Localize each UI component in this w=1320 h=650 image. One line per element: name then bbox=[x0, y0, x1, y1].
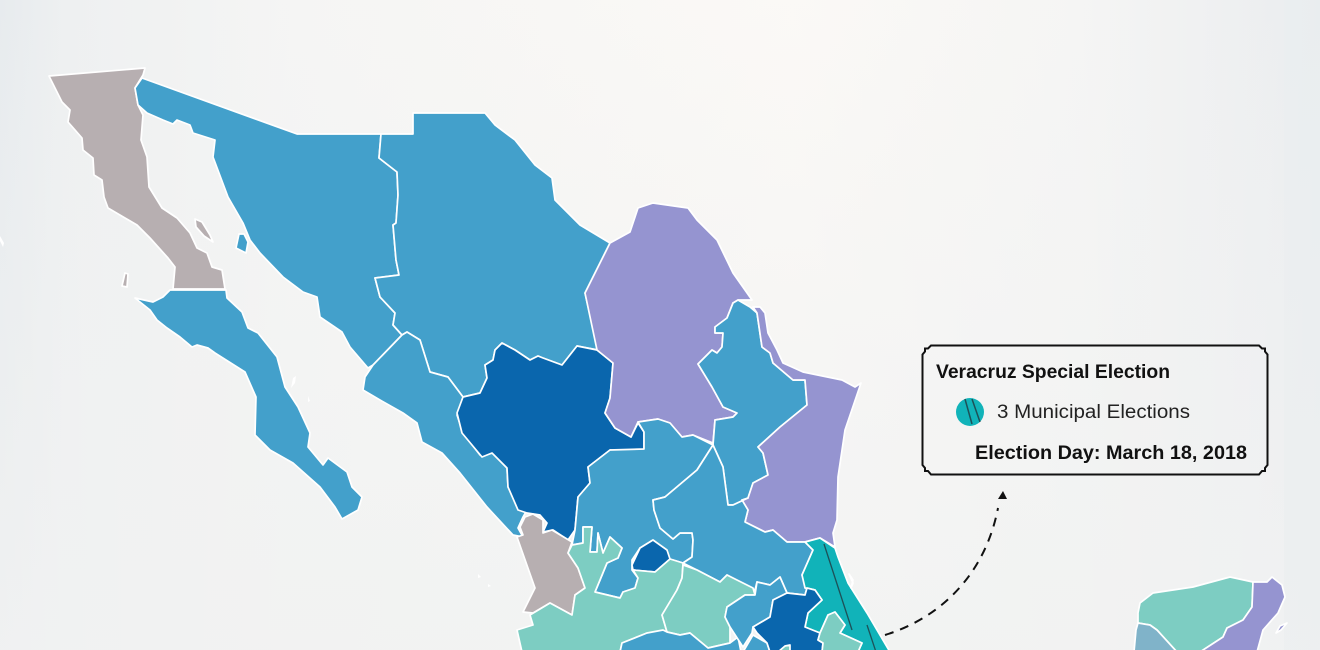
state: Quintana Roo bbox=[1200, 577, 1287, 650]
callout: Veracruz special election bbox=[922, 346, 1268, 474]
special-election hatch lines on Veracruz bbox=[824, 544, 876, 650]
state: Baja California Sur bbox=[135, 290, 362, 519]
dashed arrow to callout bbox=[885, 491, 1007, 635]
state: Durango bbox=[457, 343, 644, 540]
state: Sonora bbox=[135, 78, 402, 368]
callout heading: Veracruz Special Election bbox=[936, 362, 1170, 383]
state: Puebla bbox=[818, 612, 862, 650]
state: Nuevo Leon bbox=[698, 300, 807, 505]
small islands bbox=[0, 236, 491, 587]
state: Tlaxcala bbox=[778, 645, 790, 650]
state: Coahuila bbox=[585, 203, 752, 443]
state: Jalisco bbox=[517, 527, 683, 650]
legend label: 3 Municipal Elections bbox=[997, 402, 1190, 423]
state: Veracruz bbox=[802, 538, 890, 650]
state: Yucatan bbox=[1138, 577, 1253, 650]
state: Michoacan bbox=[620, 630, 741, 650]
state: Zacatecas bbox=[572, 419, 713, 598]
state: San Luis Potosi bbox=[653, 445, 813, 595]
state: Baja California bbox=[49, 68, 225, 289]
state: Queretaro bbox=[725, 577, 787, 647]
election date: Election Day: March 18, 2018 bbox=[975, 443, 1247, 464]
state: Sinaloa bbox=[363, 332, 527, 537]
state: Nayarit bbox=[517, 514, 585, 615]
state: Chihuahua bbox=[375, 113, 610, 397]
state: Hidalgo bbox=[753, 588, 823, 650]
state: Guanajuato bbox=[662, 565, 755, 648]
legend icon: hatched teal circle bbox=[956, 398, 984, 426]
state: Tamaulipas bbox=[742, 307, 861, 547]
state: Campeche bbox=[1134, 623, 1177, 650]
state: Mexico bbox=[743, 635, 770, 650]
state: Aguascalientes bbox=[632, 540, 670, 572]
island: Veracruz coast bbox=[849, 574, 853, 588]
